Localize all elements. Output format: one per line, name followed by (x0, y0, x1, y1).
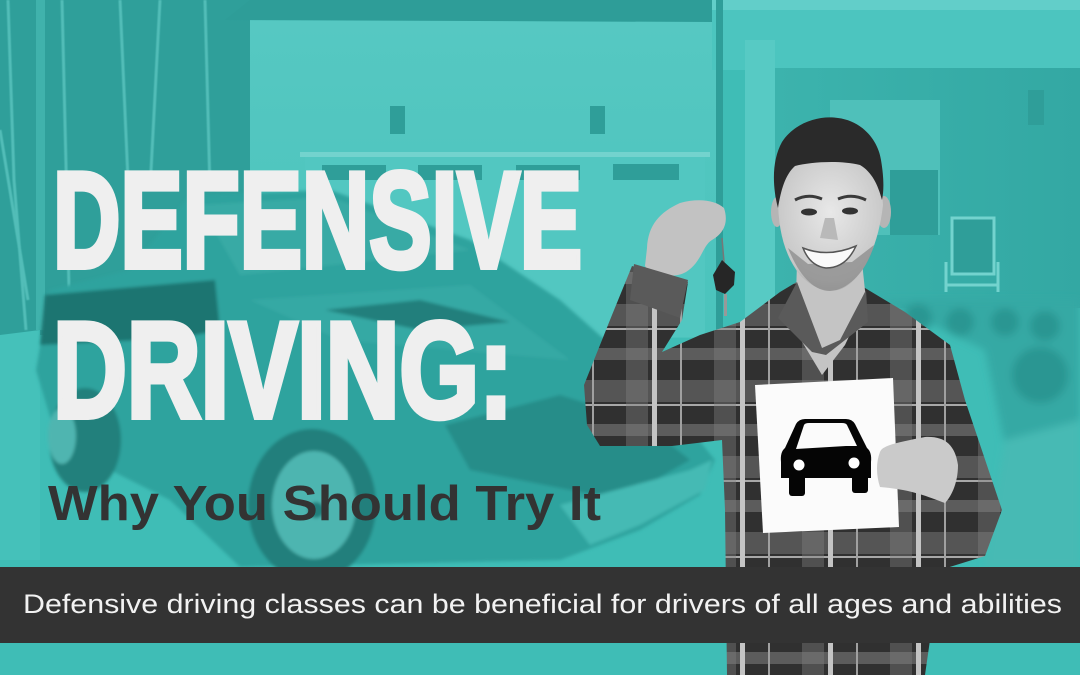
dark caption band (0, 567, 1080, 643)
white sign (755, 378, 899, 533)
eyes and smile (795, 196, 866, 268)
beard (788, 245, 874, 291)
man holding keys and car sign (584, 117, 1002, 675)
icon: car (781, 419, 871, 496)
keys (713, 238, 735, 316)
subtitle: Why You Should Try It (48, 477, 601, 531)
parked car (36, 190, 715, 581)
car body (36, 190, 715, 567)
collar and neck (795, 262, 866, 375)
foliage (880, 300, 1080, 567)
house wall (225, 0, 720, 338)
wall lamps (390, 106, 605, 134)
trees (0, 0, 255, 335)
title: DRIVING: (53, 294, 513, 446)
cuff (630, 264, 688, 318)
ears (771, 196, 891, 228)
left hand (645, 200, 726, 276)
garage door windows (322, 164, 679, 180)
hair (774, 117, 883, 208)
right hand (877, 437, 958, 503)
caption text: Defensive driving classes can be beneficial for drivers of all ages and abilities (23, 589, 1062, 619)
shirt and arms (584, 266, 1002, 675)
head (778, 160, 883, 290)
rear wheel (49, 388, 121, 492)
porch (712, 0, 1080, 330)
title (53, 144, 582, 446)
driveway (0, 330, 725, 675)
porch chair (946, 218, 998, 292)
front wheel (248, 429, 376, 581)
title: DEFENSIVE (53, 144, 582, 296)
